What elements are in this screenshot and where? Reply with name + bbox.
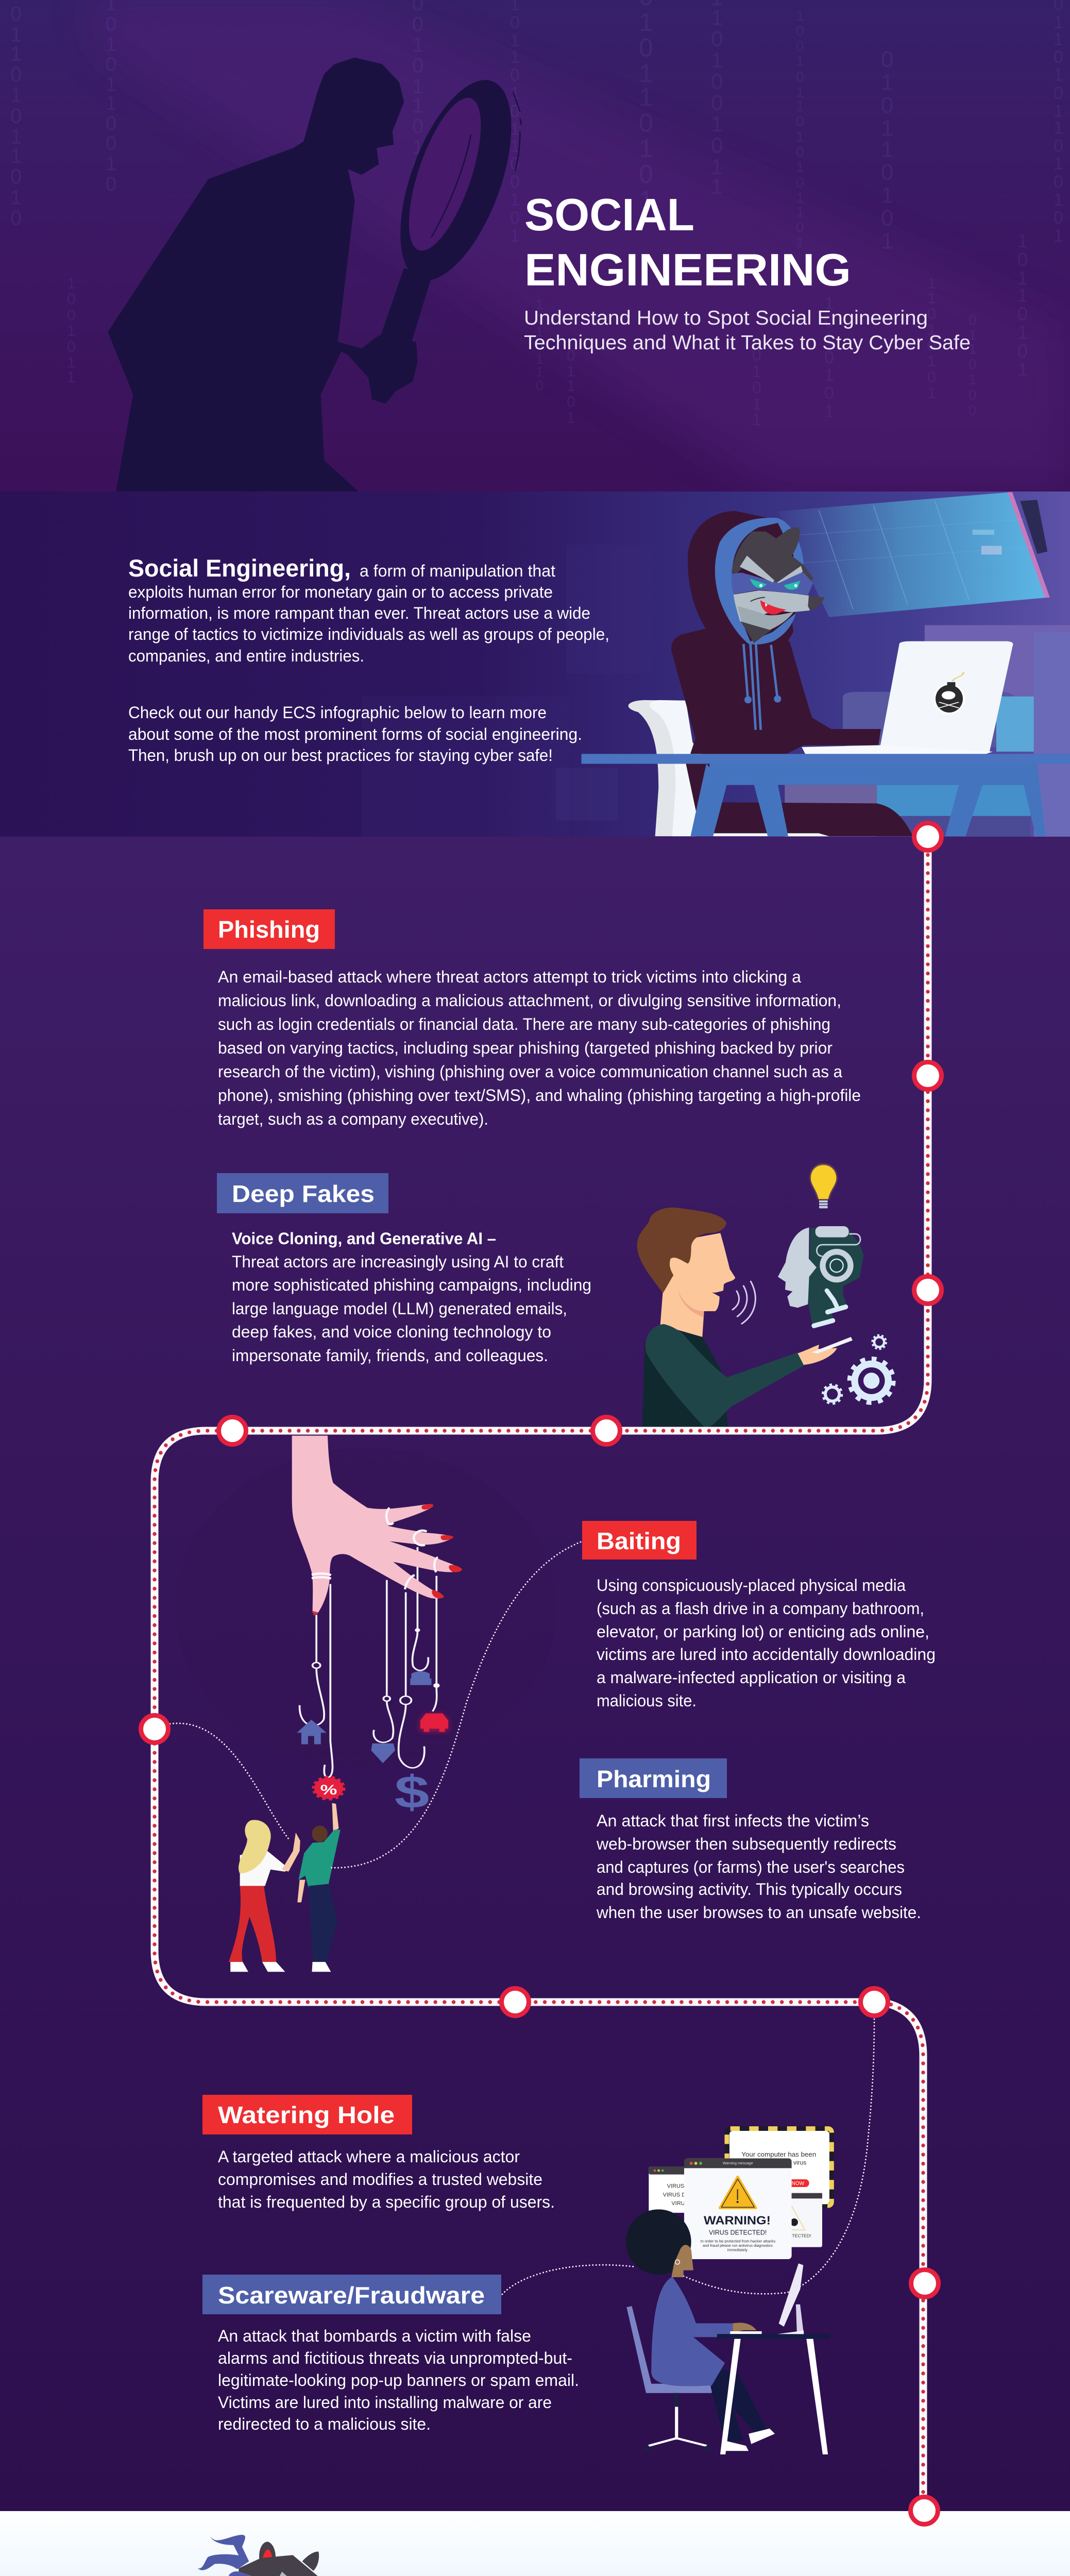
panel: Scareware/Fraudware: redirected to a malicious site. [218, 2415, 431, 2433]
intro text: range of tactics to victimize individuals as well as groups of people, [128, 625, 609, 643]
binary rain background: 01101011010 [10, 3, 31, 230]
illustration: woman and man reaching for bait [229, 1803, 341, 1972]
illustration: man and AI voice clone [637, 1164, 893, 1427]
intro text [128, 554, 609, 765]
main content background [0, 837, 1070, 2511]
intro text: companies, and entire industries. [128, 647, 364, 665]
track: dotted path [155, 837, 928, 2511]
illustration: pop-up warning windows: NOW [792, 2181, 805, 2187]
panel: Deep Fakes: Voice Cloning, and Generative AI – [232, 1229, 496, 1248]
panel: Pharming: and browsing activity. This typically occurs [597, 1880, 902, 1899]
illustration: raccoon mascot [198, 2535, 319, 2576]
intro text: Social Engineering, [128, 554, 351, 582]
intro text: information, is more rampant than ever. Threat actors use a wide [128, 604, 590, 622]
panel: Deep Fakes: more sophisticated phishing campaigns, including [232, 1276, 591, 1294]
panel: Baiting: Baiting [597, 1528, 681, 1554]
subtitle: Understand How to Spot Social Engineering [524, 307, 928, 329]
panel: Watering Hole: that is frequented by a specific group of users. [218, 2193, 555, 2211]
panel: Scareware/Fraudware: Victims are lured into installing malware or are [218, 2393, 552, 2412]
illustration: pop-up warning windows: virus [793, 2159, 806, 2166]
illustration: pop-up warning windows: VIRUS [667, 2183, 684, 2190]
title: SOCIAL [524, 189, 694, 240]
panel: Phishing: based on varying tactics, including spear phishing (targeted phishing backed by prior [218, 1039, 833, 1057]
panel: Pharming: when the user browses to an unsafe website. [596, 1903, 921, 1922]
icons: bait on hooks [297, 1671, 448, 1818]
panel: Watering Hole: Watering Hole [218, 2102, 395, 2128]
binary rain background: 10110101100101 [510, 0, 528, 246]
panel: Baiting: elevator, or parking lot) or enticing ads online, [597, 1622, 929, 1641]
illustration: hand with fishing hooks [292, 1436, 462, 1777]
panel: Deep Fakes: impersonate family, friends, and colleagues. [232, 1346, 548, 1365]
panel: Deep Fakes: large language model (LLM) generated emails, [232, 1299, 567, 1318]
panel: Scareware/Fraudware: alarms and fictitious threats via unprompted-but- [218, 2349, 572, 2367]
binary rain background: 0110100 [969, 312, 984, 418]
illustration: pop-up warning windows: In order to be protected from hacker attacks [701, 2240, 776, 2243]
panel: Phishing: phone), smishing (phishing over text/SMS), and whaling (phishing targeting a high-profile [218, 1086, 861, 1105]
panel: Phishing: An email-based attack where threat actors attempt to trick victims into clicking a [218, 968, 801, 986]
panel: Baiting [582, 1521, 936, 1710]
hero silhouette: man with magnifying glass [108, 58, 533, 492]
panel: Baiting: victims are lured into accidentally downloading [597, 1645, 936, 1664]
binary rain background: 010110101 [881, 47, 904, 254]
panel: Phishing: research of the victim), vishing (phishing over a voice communication channel such as a [218, 1062, 842, 1081]
illustration: pop-up warning windows: VIRUS DETECTED! [709, 2228, 767, 2236]
binary rain background: 01101 [567, 347, 583, 427]
title [524, 189, 851, 295]
panel: Scareware/Fraudware: An attack that bombards a victim with false [218, 2327, 531, 2345]
binary rain background: 10110101 [1017, 230, 1036, 380]
panel: Deep Fakes: Threat actors are increasingly using AI to craft [232, 1252, 564, 1271]
panel: Watering Hole: A targeted attack where a malicious actor [218, 2147, 520, 2166]
binary rain background: 1001011 [67, 275, 83, 386]
illustration: pop-up warning windows: ETECTED! [789, 2233, 811, 2239]
illustration: pop-up warning windows: Warning message [723, 2161, 753, 2165]
illustration: woman at computer [626, 2209, 830, 2454]
panel: Baiting: Using conspicuously-placed physical media [597, 1576, 906, 1595]
panel: Pharming [580, 1758, 921, 1922]
illustration: pop-up warning windows: WARNING! [704, 2213, 771, 2227]
connector dotted lines [170, 1542, 874, 2294]
panel: Phishing: target, such as a company executive). [218, 1110, 488, 1128]
binary rain background: 01011 [752, 346, 769, 429]
panel: Phishing: such as login credentials or financial data. There are many sub-categories of phishing [218, 1015, 830, 1033]
panel: Scareware/Fraudware [202, 2275, 579, 2433]
track nodes [141, 823, 942, 2524]
footer background [0, 2511, 1070, 2576]
illustration: pop-up warning windows: VIRUS D [663, 2192, 686, 2198]
illustration: pop-up warning windows: VIRUS [671, 2200, 689, 2207]
panel: Baiting: a malware-infected application or visiting a [597, 1668, 906, 1687]
title: ENGINEERING [524, 244, 851, 295]
illustration: pop-up warning windows: and fraud please run antivirus diagnostics [703, 2244, 773, 2248]
subtitle [524, 307, 971, 354]
panel: Deep Fakes: Deep Fakes [232, 1180, 375, 1207]
panel: Deep Fakes [217, 1173, 591, 1365]
panel: Watering Hole: compromises and modifies a trusted website [218, 2170, 542, 2189]
shadow blob behind hand [175, 1448, 556, 1767]
hero section background [0, 0, 1070, 492]
panel: Pharming: Pharming [597, 1766, 711, 1792]
binary rain background: 1010101 [824, 294, 842, 421]
subtitle: Techniques and What it Takes to Stay Cyber Safe [524, 332, 971, 354]
hacker raccoon at desk [582, 511, 1070, 836]
panel: Phishing: malicious link, downloading a malicious attachment, or divulging sensitive information, [218, 991, 841, 1010]
icons: bait on hooks: % [320, 1782, 337, 1798]
panel: Pharming: and captures (or farms) the user's searches [597, 1858, 905, 1876]
panel: Watering Hole [202, 2095, 555, 2211]
panel: Phishing [203, 909, 861, 1128]
panel: Scareware/Fraudware: legitimate-looking pop-up banners or spam email. [218, 2371, 579, 2389]
binary rain background: 1010110 [536, 297, 549, 393]
intro text: about some of the most prominent forms of social engineering. [128, 725, 582, 743]
illustration: pop-up warning windows: immediately. [727, 2249, 748, 2252]
intro text: a form of manipulation that [360, 562, 555, 580]
panel: Scareware/Fraudware: Scareware/Fraudware [218, 2282, 485, 2309]
panel: Baiting: (such as a flash drive in a company bathroom, [597, 1599, 924, 1618]
intro text: Check out our handy ECS infographic below to learn more [128, 703, 547, 722]
binary rain background: 1001011010101101 [796, 8, 811, 250]
intro text: exploits human error for monetary gain or to access private [128, 583, 553, 601]
binary rain background [10, 0, 1070, 429]
illustration: pop-up warning windows [649, 2129, 831, 2259]
panel: Phishing: Phishing [218, 916, 320, 943]
panel: Pharming: web-browser then subsequently redirects [596, 1835, 896, 1853]
intro text: Then, brush up on our best practices for staying cyber safe! [128, 746, 553, 765]
illustration: pop-up warning windows: Your computer has been [741, 2150, 816, 2158]
panel: intro background scene [0, 492, 1070, 839]
panel: Baiting: malicious site. [597, 1691, 697, 1710]
panel: Deep Fakes: deep fakes, and voice cloning technology to [232, 1323, 551, 1341]
panel: Pharming: An attack that first infects the victim’s [597, 1811, 869, 1830]
icons: bait on hooks: $ [395, 1767, 429, 1818]
binary rain background: 11010101 [927, 275, 943, 402]
